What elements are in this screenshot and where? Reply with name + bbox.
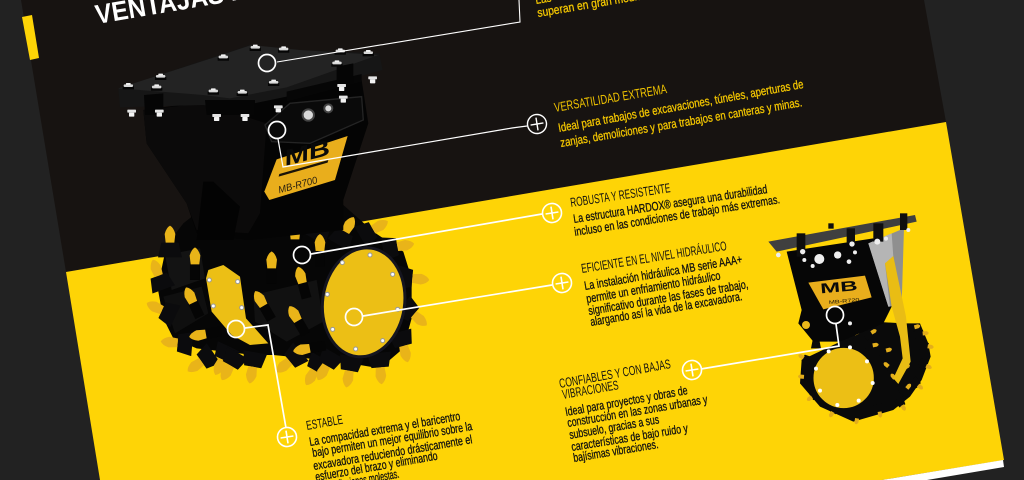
leader lines bbox=[245, 0, 839, 428]
text block: confiables: VIBRACIONES bbox=[561, 377, 620, 402]
text block: confiables: subsuelo, gracias a sus bbox=[568, 412, 660, 442]
marker circles bbox=[228, 54, 844, 338]
plate bolts bbox=[123, 45, 377, 121]
model name: MB-R700 bbox=[277, 175, 319, 196]
hydraulic connectors bbox=[303, 104, 332, 121]
text block: confiables: características de bajo ruido y bbox=[570, 421, 690, 454]
text block: confiables: Ideal para proyectos y obras de bbox=[564, 383, 689, 419]
MB logo: MB bbox=[281, 135, 333, 171]
text block: robusta y resistente: La estructura HARDOX® asegura una durabilidad bbox=[572, 182, 768, 226]
icon: plus estable bbox=[276, 426, 298, 448]
wheel disc bbox=[315, 242, 412, 362]
icon: plus confiables bbox=[681, 359, 703, 381]
machine wheels bbox=[142, 205, 434, 391]
icon: plus eficiente bbox=[551, 272, 573, 294]
text block: versatilidad extrema: Ideal para trabajos de excavaciones, túneles, aperturas de bbox=[557, 77, 805, 135]
icon: plus robusta bbox=[541, 202, 563, 224]
side plate bbox=[206, 265, 268, 345]
hydraulic recess bbox=[265, 97, 363, 143]
text block: confiables: CONFIABLES Y CON BAJAS bbox=[558, 356, 672, 391]
text block: versatilidad extrema: VERSATILIDAD EXTREMA bbox=[553, 81, 668, 115]
small disc bbox=[813, 347, 875, 409]
text block: eficiente: La instalación hidráulica MB serie AAA+ bbox=[583, 252, 743, 293]
text block: robusta y resistente: ROBUSTA Y RESISTENTE bbox=[569, 180, 672, 210]
text block: estable: ESTABLE bbox=[305, 412, 344, 433]
small logo plate bbox=[808, 276, 872, 309]
text block: confiables: bajísimas vibraciones. bbox=[572, 437, 659, 465]
text block: robusta y resistente: incluso en las condiciones de trabajo más extremas. bbox=[573, 192, 781, 239]
text block: eficiente: permite un enfriamiento hidráulico bbox=[585, 269, 722, 306]
text block: eficiente: alargando así la vida de la excavadora. bbox=[589, 289, 743, 329]
text block: estable: bajo permiten un mejor equilibrio sobre la bbox=[311, 419, 473, 460]
text block: confiables bbox=[558, 356, 709, 465]
lug hole bbox=[802, 321, 810, 329]
text block: eficiente bbox=[580, 238, 749, 329]
small bolts bbox=[776, 228, 910, 325]
panel: dark upper page bbox=[21, 0, 946, 272]
small yellow arm bbox=[885, 256, 911, 384]
text block: estable bbox=[305, 409, 473, 480]
main machine bbox=[118, 45, 434, 391]
mount plate bbox=[118, 45, 383, 108]
grey side plate bbox=[868, 228, 904, 307]
small mount plate bbox=[768, 215, 917, 252]
text block: versatilidad extrema: zanjas, demoliciones y para trabajos en canteras y minas. bbox=[559, 95, 803, 150]
text block: estable: La compacidad extrema y el baricentro bbox=[308, 409, 461, 449]
panel: yellow lower page bbox=[66, 122, 1004, 480]
small model name: MB-R720 bbox=[829, 297, 860, 306]
small wheel bbox=[800, 322, 931, 422]
logo plate bbox=[264, 136, 348, 200]
side plate bolts bbox=[207, 278, 244, 310]
small body bbox=[787, 238, 892, 342]
disc bolts bbox=[325, 253, 400, 351]
text block: confiables: construcción en las zonas urbanas y bbox=[566, 392, 709, 430]
logo tagline bbox=[279, 160, 328, 177]
text block: estable: excavadora reduciendo drásticamente el bbox=[312, 432, 473, 473]
text block: eficiente: significativo durante las fases de trabajo, bbox=[587, 277, 749, 318]
machine body bbox=[118, 45, 383, 240]
page white bottom strip bbox=[882, 460, 1004, 480]
small machine bbox=[768, 213, 934, 425]
text block: eficiente: EFICIENTE EN EL NIVEL HIDRÁULICO bbox=[580, 238, 728, 276]
yellow accent bar bbox=[22, 15, 39, 60]
icon: plus versatilidad bbox=[526, 113, 548, 135]
small MB logo: MB bbox=[820, 277, 858, 296]
